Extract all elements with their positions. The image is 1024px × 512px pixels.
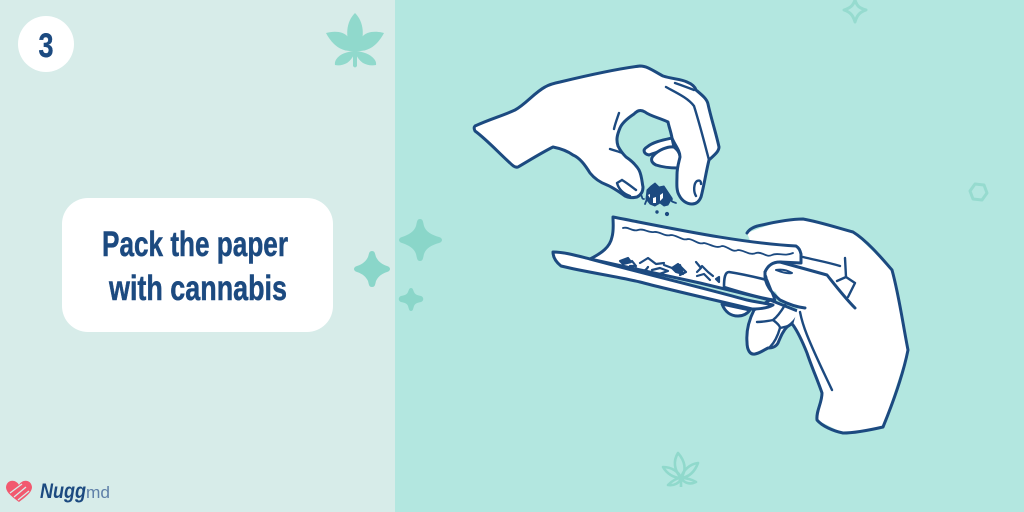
- icon: heart: [6, 481, 32, 502]
- step number badge: 3: [38, 27, 54, 65]
- thumbnail: [776, 270, 792, 273]
- logo: Nuggmd: md: [86, 483, 110, 502]
- icon: outlined cannabis leaf: [663, 453, 698, 487]
- folded fingers: [644, 138, 680, 168]
- logo: Nuggmd: [6, 480, 110, 503]
- under-finger bump: [722, 304, 750, 316]
- falling cannabis crumbs: [641, 183, 676, 216]
- step number badge: [18, 16, 74, 72]
- thumb fill: [765, 262, 855, 308]
- paper glue wavy line: [623, 228, 793, 256]
- lower fingers: [747, 300, 800, 354]
- illustration: hand sprinkling cannabis: [474, 66, 719, 216]
- rolling paper sheet: [590, 217, 801, 300]
- finger divider lines: [757, 305, 793, 347]
- holding hand outline: [747, 219, 908, 433]
- icon: outlined sparkle top right: [844, 0, 866, 22]
- thumb pad rectangle: [724, 272, 775, 300]
- panel: right background: [395, 0, 1024, 512]
- palm fill: [747, 219, 908, 433]
- heading card: with cannabis: [108, 269, 287, 308]
- heading card: [62, 198, 333, 332]
- icon: sparkle stars: [354, 219, 442, 311]
- thumb outline: [765, 262, 855, 308]
- heading card: Pack the paper: [102, 225, 288, 264]
- illustration: hand holding rolling paper: [553, 217, 908, 433]
- cannabis inside paper: [620, 258, 719, 282]
- paper tray edge: [553, 252, 773, 309]
- wordmark: Nugg: [40, 480, 86, 503]
- icon: cannabis leaf filled: [326, 13, 384, 68]
- palm crease lines: [800, 257, 855, 390]
- knuckle and fold lines: [610, 83, 709, 196]
- top hand outline: [474, 66, 719, 204]
- panel: left background: [0, 0, 395, 512]
- icon: outlined hexagon: [970, 184, 987, 200]
